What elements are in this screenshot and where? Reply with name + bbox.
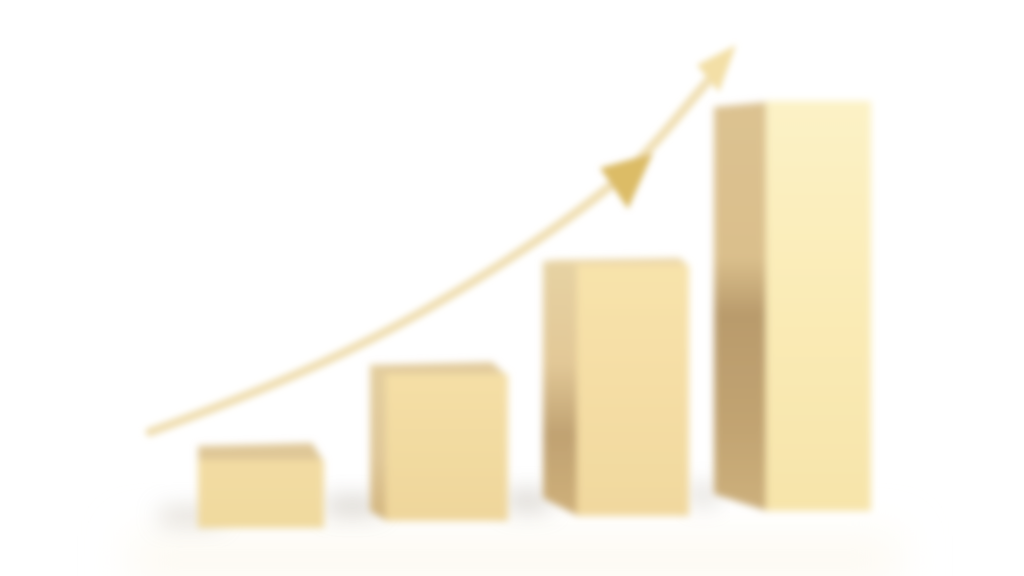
bar 3 side face: [543, 261, 578, 516]
bar 4 side face: [714, 102, 767, 511]
ground shadows: [160, 486, 718, 524]
bar 1: [198, 443, 324, 528]
arrowhead: tip: [697, 45, 736, 92]
bar 1 top face: [198, 443, 324, 462]
arrow shaft: [150, 70, 718, 432]
bar 1 front face: [198, 460, 324, 528]
growth arrow: [150, 45, 736, 432]
bar 2: [370, 362, 508, 521]
arrowhead: middle: [600, 153, 653, 209]
bar 2 side face: [370, 364, 387, 521]
bar 4: [714, 101, 871, 511]
bar 3: [543, 258, 689, 516]
bar 3 front face: [577, 265, 689, 516]
bar 3 top face: [545, 258, 689, 268]
bar 2 front face: [386, 374, 508, 521]
bar 4 front face: [766, 101, 871, 511]
bar 2 top face: [370, 362, 507, 376]
